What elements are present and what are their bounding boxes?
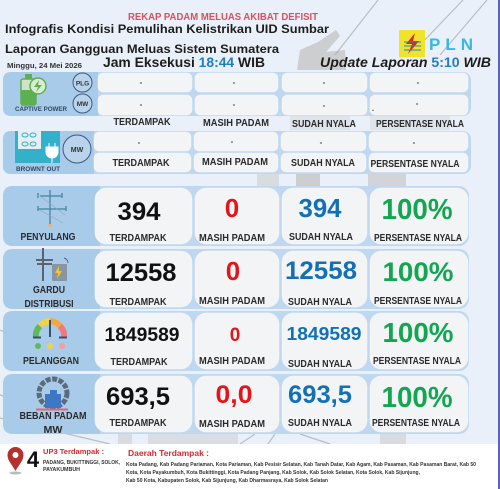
card: masih padam: MASIH PADAM (199, 233, 265, 244)
title: Infografis Kondisi Pemulihan Kelistrikan UID Sumbar (5, 22, 329, 36)
card: masih padam (195, 313, 279, 369)
card: persentase nyala: 100% (382, 382, 453, 414)
panel: captive power (3, 72, 471, 116)
label: beban padam mw: MW (44, 425, 63, 436)
card: sudah nyala: 693,5 (288, 381, 352, 409)
logo: PLN: PLN (429, 35, 473, 54)
cards row 2: - (416, 99, 419, 108)
icon: penyulang tower (38, 190, 66, 227)
cards row 1 (98, 73, 468, 92)
card: persentase nyala: 100% (382, 194, 453, 226)
label: gardu distribusi (24, 285, 74, 310)
heading: UP3 terdampak: UP3 Terdampak : (43, 447, 104, 456)
panel: brownout (3, 131, 471, 174)
cards row 2: SUDAH NYALA (291, 158, 355, 169)
card: sudah nyala (282, 251, 367, 308)
cards row 2: TERDAMPAK (112, 158, 170, 169)
card: terdampak: 394 (118, 198, 161, 226)
card: masih padam: 0 (226, 256, 240, 286)
captive power column labels: PERSENTASE NYALA (376, 119, 464, 130)
captive power column labels: TERDAMPAK (114, 117, 171, 128)
cards row 1: - (233, 78, 236, 87)
icon: brownout plug (15, 131, 60, 163)
text: daerah list (126, 462, 476, 484)
label: beban padam mw (20, 411, 86, 436)
card: persentase nyala: 100% (382, 317, 454, 348)
panel: beban padam (3, 374, 469, 436)
label: brownout: BROWNT OUT (16, 167, 60, 173)
text: daerah list: Kab 50 Kota, Kabupaten Solok, Kab Sijunjung, Kab Dharmasraya, Kab Solok Selatan (126, 478, 328, 484)
text: UP3 list (43, 460, 121, 473)
panel: pelanggan (3, 311, 469, 371)
badge: MW: MW (71, 147, 84, 154)
card: masih padam: MASIH PADAM (199, 356, 265, 367)
card: masih padam: MASIH PADAM (199, 296, 265, 307)
icon: map pin (8, 447, 24, 474)
badge: PLG (73, 73, 92, 92)
icon: pelanggan gauge (33, 320, 67, 349)
label: gardu distribusi: GARDU (33, 285, 65, 296)
card: sudah nyala (282, 313, 367, 370)
badge: PLG: PLG (76, 80, 89, 88)
card: terdampak (95, 251, 192, 308)
card: sudah nyala: 394 (298, 193, 342, 223)
card: persentase nyala: PERSENTASE NYALA (374, 296, 462, 307)
panel: gardu distribusi (3, 248, 469, 310)
card: terdampak (95, 376, 192, 432)
card: sudah nyala (282, 188, 367, 244)
cards row 1 (94, 132, 468, 151)
icon: captive power battery (21, 74, 46, 105)
text: daerah list: Kota Padang, Kab Padang Pariaman, Kota Pariaman, Kab Pesisir Selatan, Kab Tanah Datar, Kab Agam, Kab Pasaman, Kab Pasaman Barat, Kab 50 (126, 462, 476, 468)
card: sudah nyala (282, 376, 367, 432)
cards row 1: - (231, 137, 234, 146)
card: sudah nyala: SUDAH NYALA (288, 297, 352, 308)
cards row 1: - (138, 138, 141, 147)
cards row 2: MASIH PADAM (202, 157, 268, 168)
cards row 2 (94, 153, 468, 172)
captive power column labels: SUDAH NYALA (292, 119, 356, 130)
cards row 2: - (233, 100, 236, 109)
cards row 1: - (320, 138, 323, 147)
cards row 2: PERSENTASE NYALA (370, 159, 460, 170)
cards row 1: - (413, 138, 416, 147)
cards row 2: . (372, 104, 374, 113)
card: terdampak (95, 188, 192, 244)
card: persentase nyala: PERSENTASE NYALA (372, 418, 460, 429)
cards row 2 (98, 95, 468, 115)
badge: MW: MW (77, 101, 89, 108)
text: UP3 list: PADANG, BUKITTINGGI, SOLOK, (43, 460, 121, 466)
card: terdampak (95, 313, 192, 369)
card: masih padam: 0,0 (216, 381, 252, 409)
label: gardu distribusi: DISTRIBUSI (24, 299, 74, 310)
card: persentase nyala (370, 313, 468, 369)
card: persentase nyala: 100% (382, 257, 454, 287)
text: daerah list: Kota, Kota Payakumbuh, Kota Bukittinggi, Kota Padang Panjang, Kab Solok, Kab Solok Selatan, Kota Solok, Kab Sijunjung, (126, 470, 421, 476)
cards row 1: - (140, 78, 143, 87)
card: masih padam: MASIH PADAM (199, 419, 265, 430)
date: Minggu, 24 Mei 2026 (7, 63, 82, 70)
card: terdampak: TERDAMPAK (110, 297, 167, 308)
card: terdampak: TERDAMPAK (110, 357, 168, 368)
card: terdampak: 12558 (106, 259, 177, 287)
card: persentase nyala (370, 251, 468, 307)
card: sudah nyala: SUDAH NYALA (289, 232, 353, 243)
card: masih padam (195, 251, 279, 307)
label: beban padam mw: BEBAN PADAM (20, 411, 86, 422)
card: terdampak: 1849589 (104, 325, 180, 346)
panel: penyulang (3, 186, 469, 246)
card: sudah nyala: 1849589 (286, 323, 362, 344)
card: terdampak: TERDAMPAK (110, 418, 167, 429)
badge: MW (73, 94, 92, 113)
heading: daerah terdampak: Daerah Terdampak : (128, 449, 209, 458)
label: penyulang: PENYULANG (20, 232, 76, 243)
card: sudah nyala: SUDAH NYALA (288, 418, 352, 429)
footer (0, 444, 498, 489)
card: terdampak: 693,5 (106, 383, 170, 411)
card: sudah nyala: 12558 (285, 257, 357, 285)
captive power column labels (114, 117, 464, 130)
text: UP3 list: PAYAKUMBUH (43, 467, 80, 473)
card: masih padam (195, 376, 279, 432)
icon: gardu (36, 248, 68, 281)
card: persentase nyala (370, 376, 468, 432)
count: UP3: 4 (27, 447, 40, 472)
cards row 1: - (417, 78, 420, 87)
subtitle: Laporan Gangguan Meluas Sistem Sumatera (5, 42, 279, 56)
captive power column labels: MASIH PADAM (203, 118, 269, 129)
update time: Update Laporan 5:10 WIB (320, 55, 491, 70)
card: persentase nyala: PERSENTASE NYALA (374, 233, 462, 244)
card: masih padam: 0 (225, 193, 239, 223)
top red headline: REKAP PADAM MELUAS AKIBAT DEFISIT (128, 11, 319, 23)
logo: PLN (399, 30, 473, 57)
card: sudah nyala: SUDAH NYALA (288, 359, 352, 370)
label: pelanggan: PELANGGAN (23, 356, 79, 367)
cards row 2: - (323, 101, 326, 110)
card: persentase nyala (370, 188, 468, 244)
card: persentase nyala: PERSENTASE NYALA (373, 356, 461, 367)
card: masih padam (195, 188, 279, 244)
cards row 2: - (140, 100, 143, 109)
badge: MW (63, 135, 91, 163)
card: terdampak: TERDAMPAK (110, 233, 167, 244)
execution time: Jam Eksekusi 18:44 WIB (103, 55, 265, 70)
label: captive power: CAPTIVE POWER (15, 107, 68, 113)
card: masih padam: 0 (230, 325, 240, 346)
cards row 1: - (323, 78, 326, 87)
icon: beban padam gear and building (36, 379, 68, 410)
